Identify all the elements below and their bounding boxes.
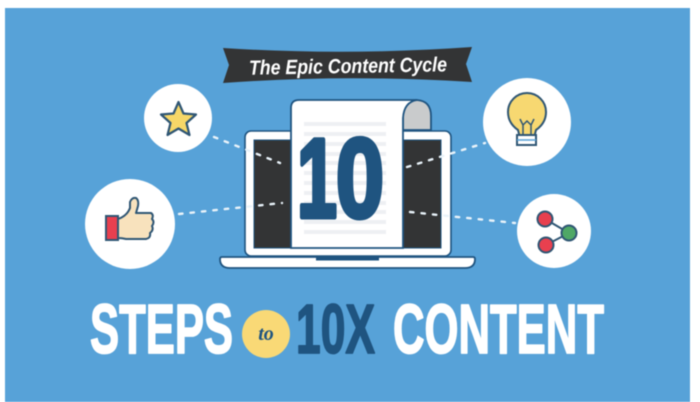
headline word: steps: STEPS [90, 290, 233, 368]
laptop [220, 131, 475, 268]
headline word: 10X: 10X [296, 290, 375, 368]
badge: to: to [258, 323, 274, 345]
laptop screen [254, 140, 441, 248]
icon: thumbs up badge [85, 179, 175, 269]
banner text: The Epic Content Cycle [249, 53, 447, 80]
icon: share nodes badge [517, 194, 591, 268]
connector: thumbs up [179, 203, 282, 214]
laptop base [220, 257, 475, 268]
laptop notch [316, 257, 379, 260]
icon: light bulb badge [483, 78, 571, 166]
connector: star [214, 137, 280, 163]
big number 10: 0 [336, 116, 384, 241]
icon: star badge [144, 84, 212, 152]
headline [90, 290, 604, 368]
paper scroll [291, 100, 431, 248]
connector: share [410, 212, 515, 223]
badge: to [242, 310, 290, 358]
big number 10: 1 [297, 116, 337, 241]
title banner [223, 47, 472, 83]
scroll curl [403, 100, 431, 130]
connector: light bulb [407, 143, 485, 167]
